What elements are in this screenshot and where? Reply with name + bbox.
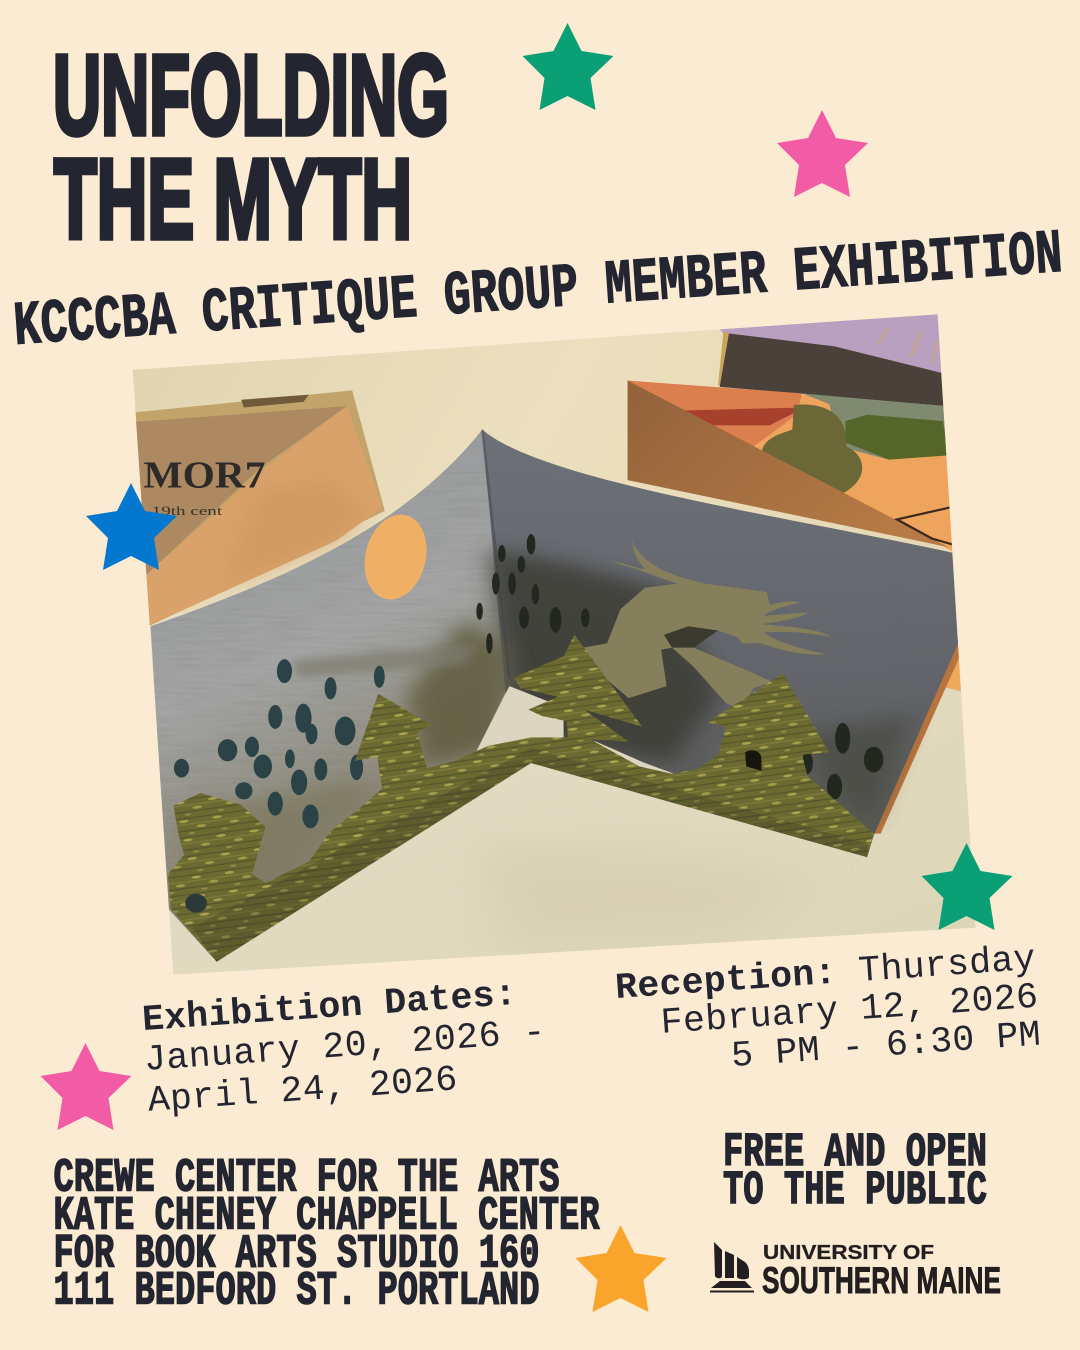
star: blue [86,483,177,570]
paper grain [157,500,486,730]
table surface [150,613,976,974]
free admission note: TO THE PUBLIC [723,1165,987,1218]
house window [745,750,761,771]
book right edge [874,637,959,834]
address: 111 BEDFORD ST. PORTLAND [54,1266,540,1318]
table shadow [500,855,737,934]
free admission note: FREE AND OPEN [723,1127,987,1180]
left book behind [133,390,385,626]
exhibition dates [140,972,549,1122]
right book behind [628,381,966,693]
photo: pop-up book artwork [130,310,997,994]
cream gaps behind trees [477,686,564,750]
crease [482,430,509,678]
gray panel right [482,430,962,857]
back book [718,314,946,406]
icon: building columns [710,1242,754,1292]
title [53,32,449,262]
star: pink lower [40,1043,132,1130]
wordmark: UNIVERSITY OF [763,1242,934,1264]
reception details: Reception: Thursday [614,939,1037,1009]
title: THE MYTH [54,136,412,262]
wordmark [762,1242,1001,1301]
painted leaves [174,659,385,828]
reception details: 5 PM - 6:30 PM [730,1015,1042,1077]
free admission note [723,1127,987,1218]
address: KATE CHENEY CHAPPELL CENTER [54,1190,600,1244]
exhibition dates: April 24, 2026 [147,1059,459,1122]
left book behind: 19th cent [152,505,222,519]
logo: University of Southern Maine [710,1242,1001,1301]
title: UNFOLDING [53,32,449,158]
leaf on bush [185,894,207,913]
creature cutout [572,539,832,710]
olive bottom shading [192,748,868,962]
gray panel left [151,430,512,962]
star: orange [576,1225,666,1312]
olive landscape cutout [168,635,874,962]
star: green lower [922,843,1012,930]
exhibition dates: Exhibition Dates: [141,974,518,1041]
reception details [614,939,1042,1085]
star: green top [522,23,614,110]
reception details: February 12, 2026 [659,977,1039,1044]
address: CREWE CENTER FOR THE ARTS [54,1152,560,1206]
wall backdrop [132,314,952,614]
left book behind: MOR7 [144,453,265,496]
moon [364,514,427,600]
address [54,1152,600,1318]
star: pink top [777,110,868,197]
address: FOR BOOK ARTS STUDIO 160 [54,1228,540,1282]
fold shadow [488,549,721,763]
exhibition dates: January 20, 2026 - [143,1012,547,1081]
